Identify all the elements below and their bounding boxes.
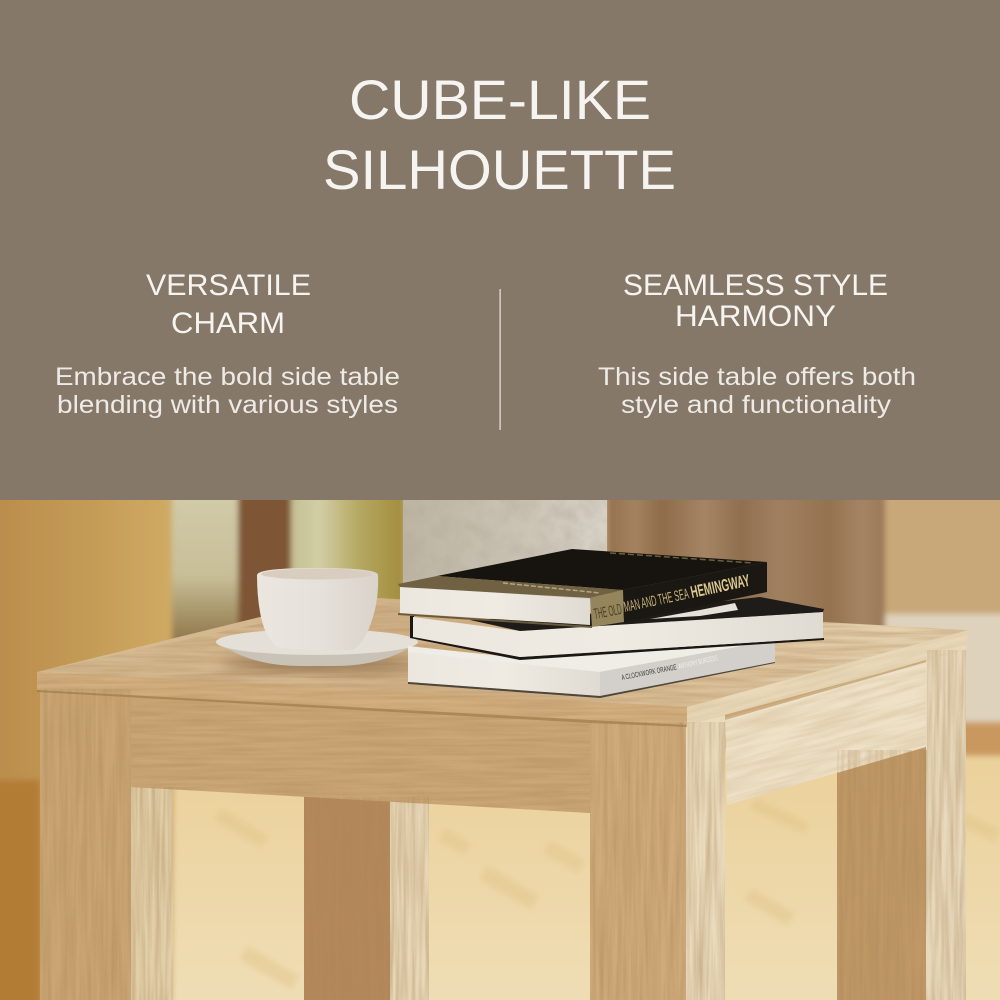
heading: seamless style harmony xyxy=(623,269,888,333)
text block: versatile charm description: Embrace the bold side table xyxy=(55,363,400,391)
floor xyxy=(170,750,1000,1000)
book: The Old Man and the Sea: HEMINGWAY xyxy=(689,571,752,602)
heading: versatile charm: CHARM xyxy=(171,307,285,340)
leg: back right xyxy=(837,650,966,1000)
heading: versatile charm xyxy=(146,269,311,340)
table top side edge xyxy=(687,630,968,725)
photo: room background xyxy=(0,470,1000,1000)
heading: versatile charm: VERSATILE xyxy=(146,269,311,302)
text block: seamless style description: style and functionality xyxy=(621,391,892,419)
book: The Old Man and the Sea: THE OLD xyxy=(593,601,623,623)
text block: versatile charm description xyxy=(55,363,400,419)
text block: seamless style description xyxy=(598,363,916,419)
table top surface xyxy=(37,598,968,707)
leg: back left xyxy=(304,790,429,1000)
panel: heading background xyxy=(0,0,1000,500)
curtain xyxy=(607,500,888,626)
apron: front xyxy=(131,696,590,813)
right feature: seamless style harmony xyxy=(598,269,916,419)
book: black hardcover middle xyxy=(410,597,824,660)
saucer and coffee cup xyxy=(216,568,420,671)
heading: seamless style harmony: SEAMLESS STYLE xyxy=(623,269,888,302)
cup xyxy=(257,568,378,651)
book: The Old Man and the Sea: MAN AND THE SEA xyxy=(622,586,690,616)
book: A Clockwork Orange: ANTHONY BURGESS xyxy=(677,653,718,671)
table top front edge xyxy=(37,672,687,725)
title: CUBE-LIKE xyxy=(349,68,651,131)
book: A Clockwork Orange: A CLOCKWORK ORANGE xyxy=(621,662,677,682)
leg: front corner xyxy=(590,715,725,1000)
apron: side xyxy=(725,660,926,805)
title xyxy=(323,68,676,201)
stone pillar xyxy=(403,500,607,610)
book: The Old Man and the Sea xyxy=(398,549,767,628)
left feature: versatile charm xyxy=(55,269,400,419)
text block: seamless style description: This side table offers both xyxy=(598,363,916,391)
saucer xyxy=(216,629,418,666)
book: A Clockwork Orange xyxy=(408,640,775,698)
side table xyxy=(37,598,968,1000)
leg: front left xyxy=(40,688,173,1000)
text block: versatile charm description: blending with various styles xyxy=(57,391,398,419)
heading: seamless style harmony: HARMONY xyxy=(675,300,836,333)
title: SILHOUETTE xyxy=(323,138,676,201)
stack of books xyxy=(398,549,824,698)
chair xyxy=(0,470,176,1000)
